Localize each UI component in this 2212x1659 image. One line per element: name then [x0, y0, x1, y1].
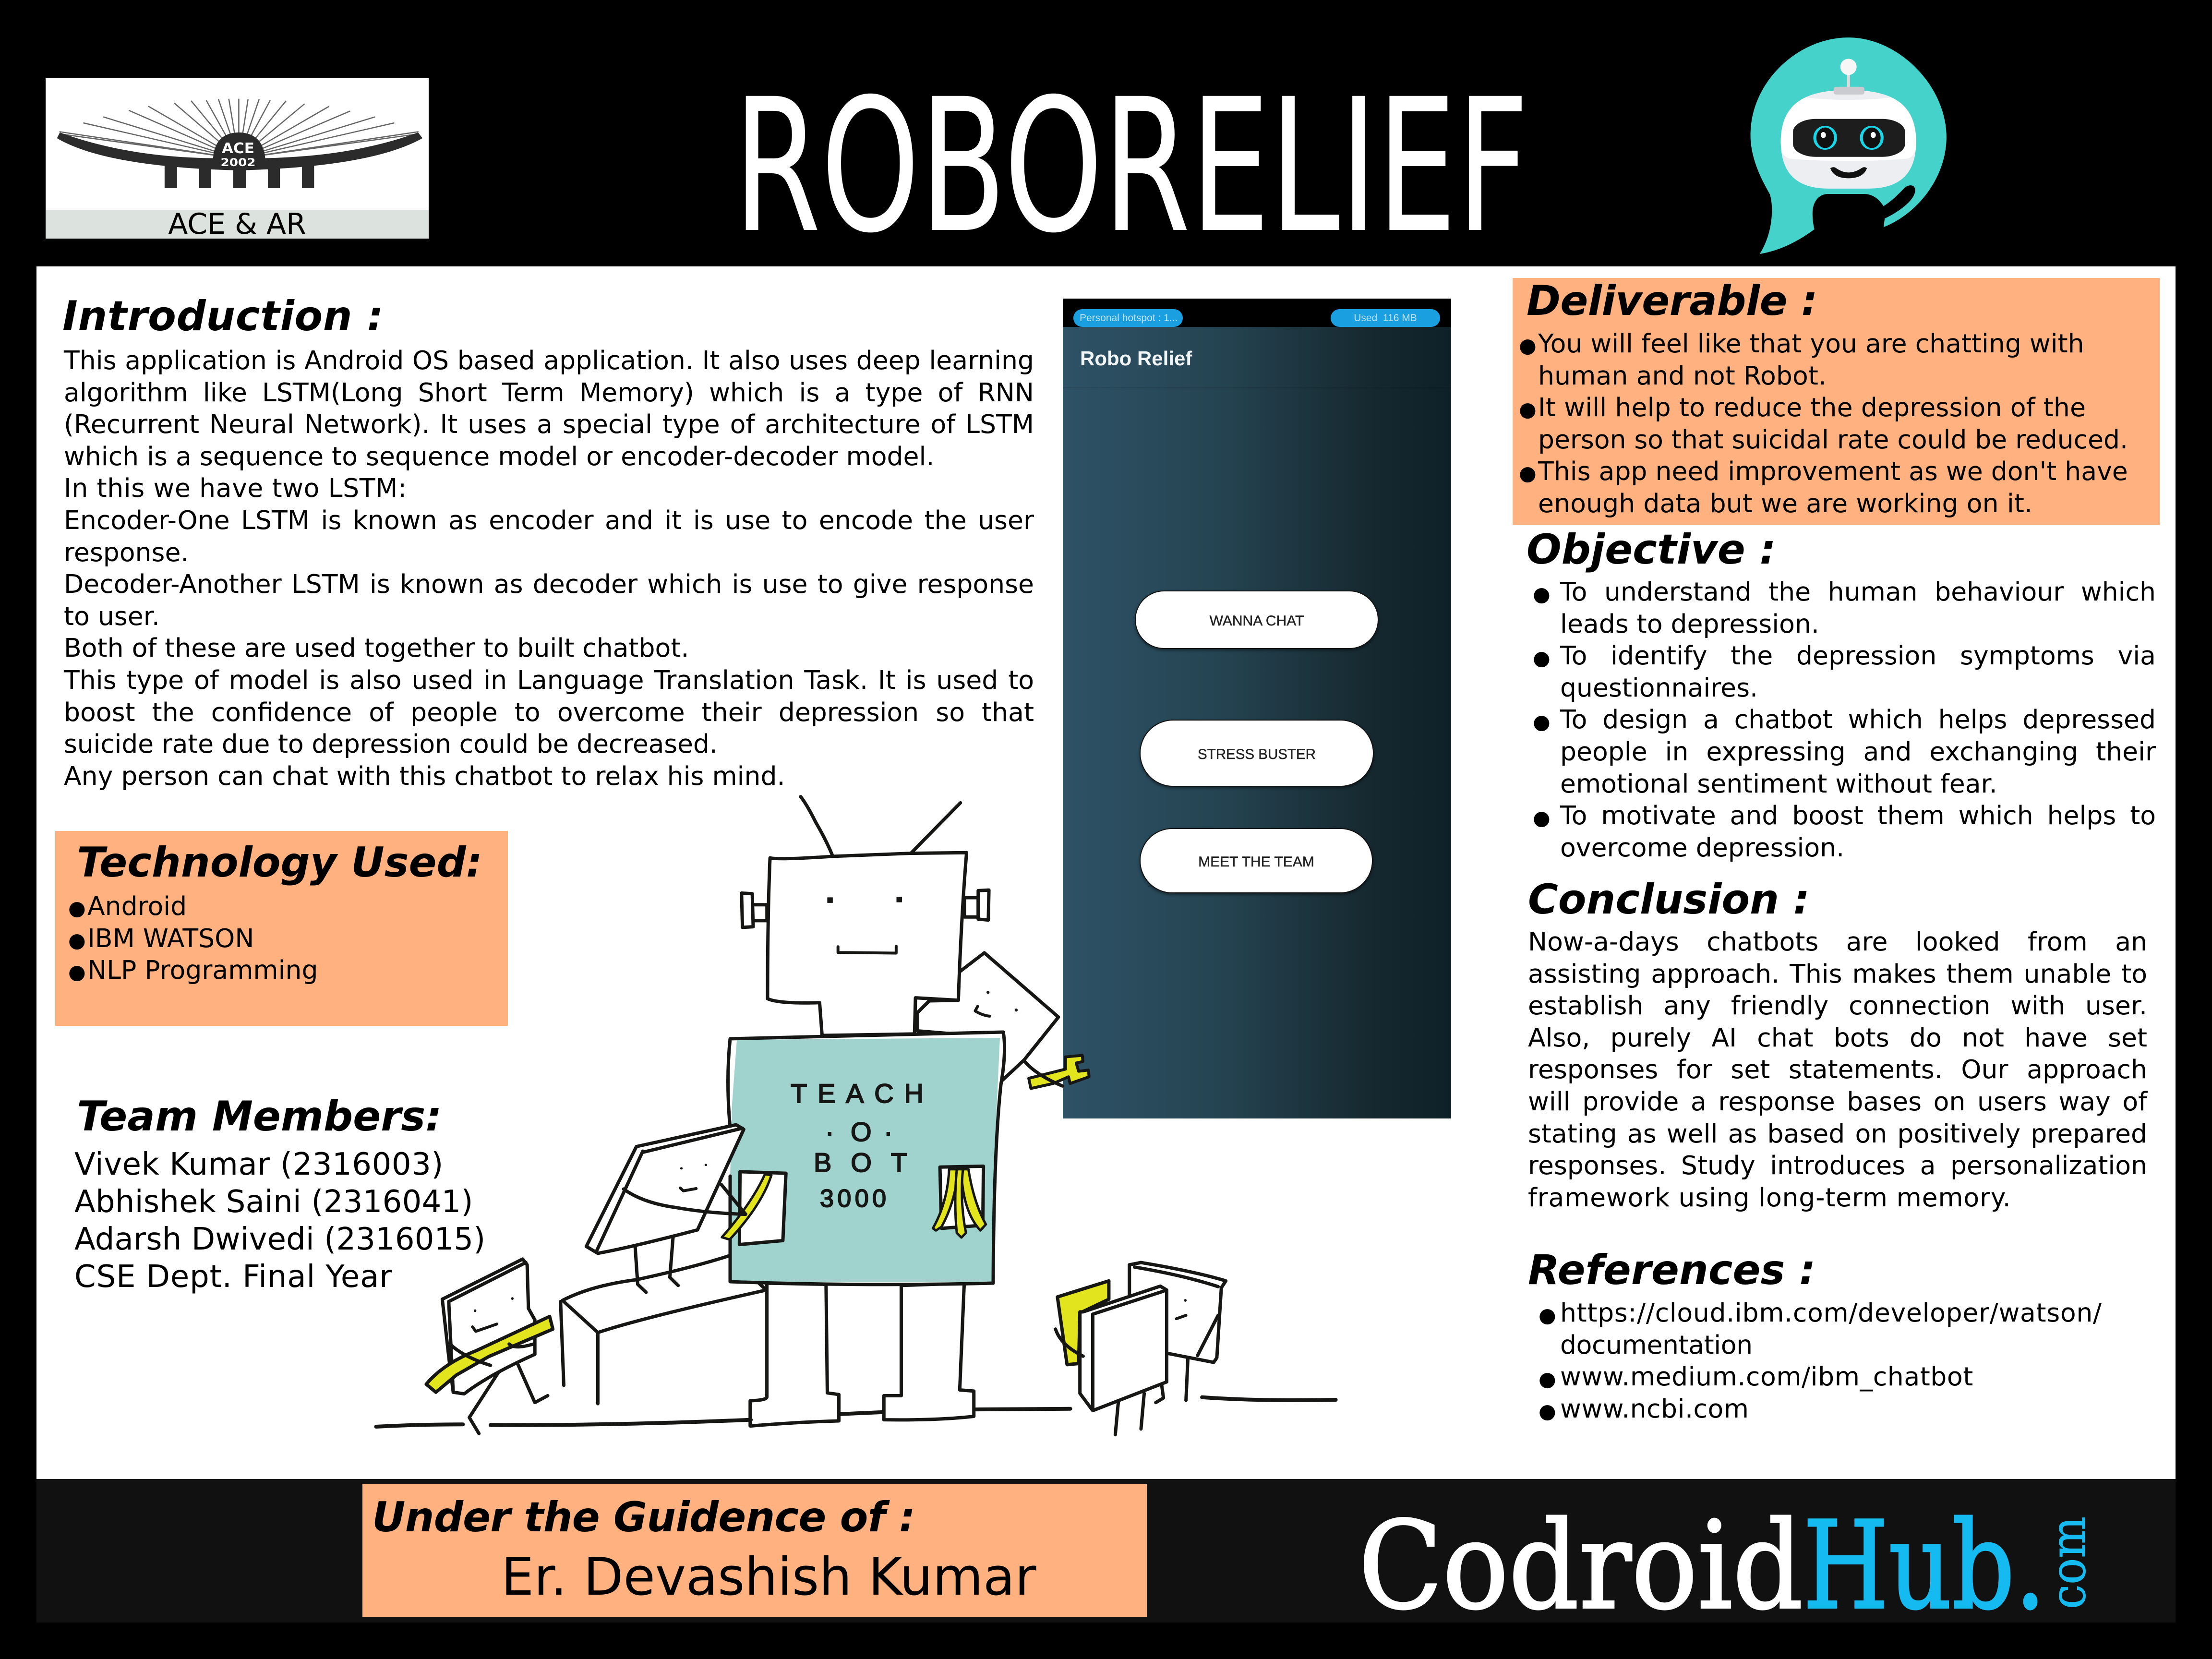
- text block: conclusion body: stating as well as based on positively prepared: [1528, 1118, 2147, 1149]
- button: stress buster: STRESS BUSTER: [1198, 746, 1316, 762]
- heading: guidance label: Under the Guidence of :: [372, 1494, 915, 1541]
- text block: objective list: leads to depression.: [1560, 609, 1819, 639]
- text block: deliverable list: [1519, 328, 2128, 518]
- text block: deliverable list: enough data but we are working on it.: [1538, 488, 2032, 518]
- text block: technology list: ●: [68, 960, 86, 984]
- logo: CodroidHub: Hub.: [1803, 1496, 2046, 1636]
- status pill: data used: [1331, 309, 1440, 327]
- button: meet the team: MEET THE TEAM: [1198, 854, 1314, 870]
- text block: deliverable list: This app need improvement as we don't have: [1538, 456, 2128, 486]
- text block: introduction body: Both of these are used together to built chatbot.: [64, 633, 689, 663]
- text block: technology list: IBM WATSON: [87, 923, 254, 953]
- logo: CodroidHub: com: [2040, 1516, 2096, 1609]
- logo caption band: [46, 210, 429, 239]
- text block: objective list: To motivate and boost them which helps to: [1560, 800, 2156, 830]
- heading: References: References :: [1528, 1247, 1815, 1294]
- panel: deliverable: [1513, 278, 2160, 525]
- text block: deliverable list: person so that suicidal rate could be reduced.: [1538, 424, 2128, 455]
- text block: introduction body: suicide rate due to depression could be decreased.: [64, 729, 718, 759]
- text: ●: [1539, 1399, 1556, 1423]
- text block: conclusion body: Now-a-days chatbots are looked from an: [1528, 926, 2147, 957]
- heading: Technology Used: Technology Used:: [77, 839, 482, 887]
- heading: Conclusion: Conclusion :: [1528, 876, 1810, 924]
- text block: conclusion body: Also, purely AI chat bots do not have set: [1528, 1022, 2147, 1053]
- text block: objective list: emotional sentiment without fear.: [1560, 769, 1997, 799]
- button: wanna chat: [1135, 590, 1379, 649]
- icon: robot chat bubble: [1750, 37, 1947, 254]
- text block: conclusion body: will provide a response bases on users way of: [1528, 1086, 2147, 1117]
- text block: guide name: Er. Devashish Kumar: [501, 1547, 1036, 1607]
- text block: deliverable list: You will feel like that you are chatting with: [1538, 328, 2084, 359]
- icon: ACE bridge emblem: 2002: [221, 157, 255, 169]
- text block: introduction body: boost the confidence of people to overcome their depression so that: [64, 697, 1034, 727]
- phone status bar: [1063, 299, 1451, 327]
- yellow wrench: [1024, 1056, 1089, 1088]
- robot head: [742, 797, 1058, 1082]
- text block: references list: [1539, 1298, 2102, 1424]
- text block: conclusion body: establish any friendly connection with user.: [1528, 990, 2147, 1021]
- step box: [561, 1256, 766, 1404]
- text block: deliverable list: ●: [1519, 397, 1537, 421]
- text block: introduction body: Any person can chat with this chatbot to relax his mind.: [64, 761, 785, 791]
- text block: team members: [74, 1147, 485, 1295]
- torso lettering: [791, 1078, 924, 1213]
- heading: Objective: Objective :: [1527, 526, 1776, 574]
- torso lettering: 3000: [820, 1185, 886, 1213]
- text block: deliverable list: It will help to reduce the depression of the: [1538, 392, 2086, 422]
- text block: deliverable list: ●: [1519, 461, 1537, 485]
- text block: introduction body: Decoder-Another LSTM is known as decoder which is use to give response: [64, 569, 1034, 599]
- text block: introduction body: response.: [64, 537, 189, 567]
- text block: introduction body: [63, 345, 1034, 791]
- tablet helper robot: [586, 1125, 771, 1292]
- text block: technology list: ●: [68, 896, 86, 920]
- heading: Introduction: Introduction :: [62, 293, 384, 340]
- logo panel: ACE & AR: [46, 78, 429, 239]
- text: ●: [1533, 646, 1551, 670]
- logo: CodroidHub: [1358, 1496, 2096, 1636]
- text block: team members: Abhishek Saini (2316041): [74, 1184, 473, 1220]
- illustration: teach-o-bot robot with helpers: [374, 795, 1338, 1436]
- text block: technology list: ●: [68, 928, 86, 952]
- text block: references list: www.ncbi.com: [1560, 1394, 1749, 1424]
- torso lettering: TEACH: [791, 1078, 924, 1108]
- button: meet the team: [1140, 828, 1373, 893]
- panel: guidance: [362, 1484, 1147, 1617]
- app bar divider: [1063, 387, 1451, 388]
- torso lettering: ·O·: [825, 1117, 893, 1147]
- title: ROBORELIEF: [733, 60, 1529, 274]
- icon: ACE bridge emblem: [57, 98, 422, 188]
- panel: technology used: [55, 831, 508, 1026]
- text block: references list: www.medium.com/ibm_chatbot: [1560, 1361, 1973, 1392]
- text block: references list: documentation: [1560, 1330, 1753, 1360]
- text block: conclusion body: responses. Study introduces a personalization: [1528, 1150, 2147, 1180]
- text block: team members: Vivek Kumar (2316003): [74, 1147, 444, 1182]
- text block: introduction body: (Recurrent Neural Network). It uses a special type of architecture of LSTM: [64, 409, 1034, 439]
- text block: team members: CSE Dept. Final Year: [74, 1259, 393, 1295]
- text block: introduction body: This application is Android OS based application. It also uses deep learning: [64, 345, 1034, 375]
- text block: introduction body: algorithm like LSTM(Long Short Term Memory) which is a type of RNN: [64, 377, 1034, 408]
- book helper robots: [1056, 1262, 1226, 1435]
- text: ●: [1533, 582, 1551, 606]
- panel: main white content area: [36, 266, 2176, 1479]
- text: ●: [1539, 1303, 1556, 1327]
- torso lettering: BOT: [814, 1147, 907, 1178]
- robot legs: [750, 1283, 974, 1426]
- text block: objective list: questionnaires.: [1560, 673, 1758, 703]
- text block: objective list: people in expressing and exchanging their: [1560, 736, 2156, 767]
- text block: objective list: To design a chatbot which helps depressed: [1560, 704, 2156, 734]
- text block: objective list: To understand the human behaviour which: [1560, 577, 2156, 607]
- text: ●: [1533, 806, 1551, 830]
- text block: deliverable list: ●: [1519, 334, 1537, 357]
- panel: phone app screenshot: [1063, 299, 1451, 1118]
- text: ●: [1533, 710, 1551, 733]
- text block: technology list: NLP Programming: [87, 955, 318, 985]
- text block: conclusion body: assisting approach. This makes them unable to: [1528, 959, 2147, 989]
- status pill: hotspot: [1073, 309, 1183, 327]
- logo caption band: ACE & AR: [168, 207, 306, 241]
- text block: objective list: [1533, 577, 2156, 863]
- app bar title: Robo Relief: [1080, 347, 1192, 370]
- heading: Deliverable: Deliverable :: [1527, 277, 1817, 325]
- text block: introduction body: to user.: [64, 601, 160, 631]
- text block: conclusion body: responses for set statements. Our approach: [1528, 1054, 2147, 1084]
- panel: footer bar: [36, 1479, 2176, 1623]
- text block: deliverable list: human and not Robot.: [1538, 361, 1827, 391]
- text block: introduction body: which is a sequence to sequence model or encoder-decoder model.: [64, 441, 934, 471]
- text block: introduction body: This type of model is also used in Language Translation Task. It is used to: [64, 665, 1034, 695]
- text block: team members: Adarsh Dwivedi (2316015): [74, 1222, 485, 1257]
- status pill: data used: Used 116 MB: [1354, 313, 1417, 324]
- heading: Team Members: Team Members:: [77, 1093, 442, 1141]
- robot torso: [728, 1032, 1005, 1285]
- text block: objective list: overcome depression.: [1560, 832, 1844, 863]
- icon: ACE bridge emblem: ACE: [222, 140, 254, 157]
- text block: conclusion body: framework using long-term memory.: [1528, 1182, 2011, 1213]
- text block: technology list: [68, 891, 318, 985]
- text block: introduction body: Encoder-One LSTM is known as encoder and it is use to encode the user: [64, 505, 1034, 535]
- button: stress buster: [1140, 720, 1374, 787]
- pockets: [739, 1166, 986, 1245]
- text block: references list: https://cloud.ibm.com/developer/watson/: [1560, 1298, 2102, 1328]
- text block: introduction body: In this we have two LSTM:: [64, 473, 407, 503]
- text block: conclusion body: [1528, 926, 2148, 1213]
- small helper robot with ruler: [426, 1259, 553, 1433]
- ground lines: [376, 1397, 1336, 1427]
- status pill: hotspot: Personal hotspot : 1...: [1080, 313, 1178, 324]
- text block: objective list: To identify the depression symptoms via: [1560, 640, 2156, 671]
- button: wanna chat: WANNA CHAT: [1210, 613, 1304, 629]
- text block: technology list: Android: [87, 891, 187, 921]
- logo: CodroidHub: Codroid: [1358, 1496, 1803, 1636]
- text: ●: [1539, 1367, 1556, 1391]
